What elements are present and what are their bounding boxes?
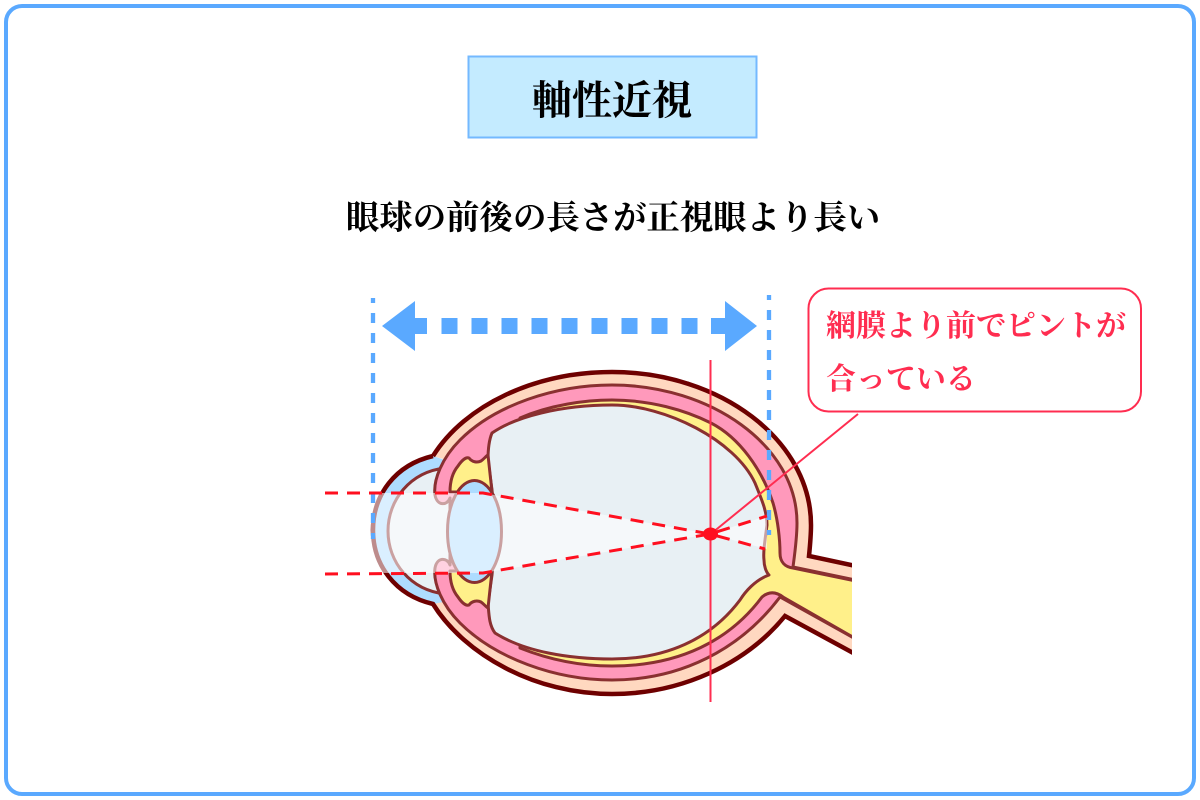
anterior chamber [386, 467, 448, 594]
left measure line [371, 298, 375, 539]
title: 軸性近視 [532, 78, 692, 123]
vitreous body [488, 405, 769, 659]
cornea [373, 456, 448, 604]
light rays [325, 493, 767, 574]
lens [448, 480, 502, 582]
vertical focal line [710, 360, 712, 702]
title box [468, 56, 756, 138]
diagram: eyeball cross-section [373, 372, 870, 694]
retina and optic nerve [520, 400, 870, 666]
right measure line [767, 295, 771, 535]
callout text line 2: 合っている [826, 363, 976, 396]
callout [808, 288, 1141, 412]
choroid and iris [435, 385, 870, 680]
callout leader line [712, 414, 858, 533]
focal point [703, 528, 718, 540]
double-headed dotted arrow [382, 301, 757, 351]
outer wall outline [373, 372, 870, 694]
ciliary body bottom [450, 571, 492, 608]
sclera [433, 372, 870, 694]
light beam highlight [371, 493, 767, 573]
subtitle: 眼球の前後の長さが正視眼より長い [346, 200, 880, 237]
callout text line 1: 網膜より前でピントが [826, 310, 1126, 343]
ciliary body top [450, 455, 492, 492]
